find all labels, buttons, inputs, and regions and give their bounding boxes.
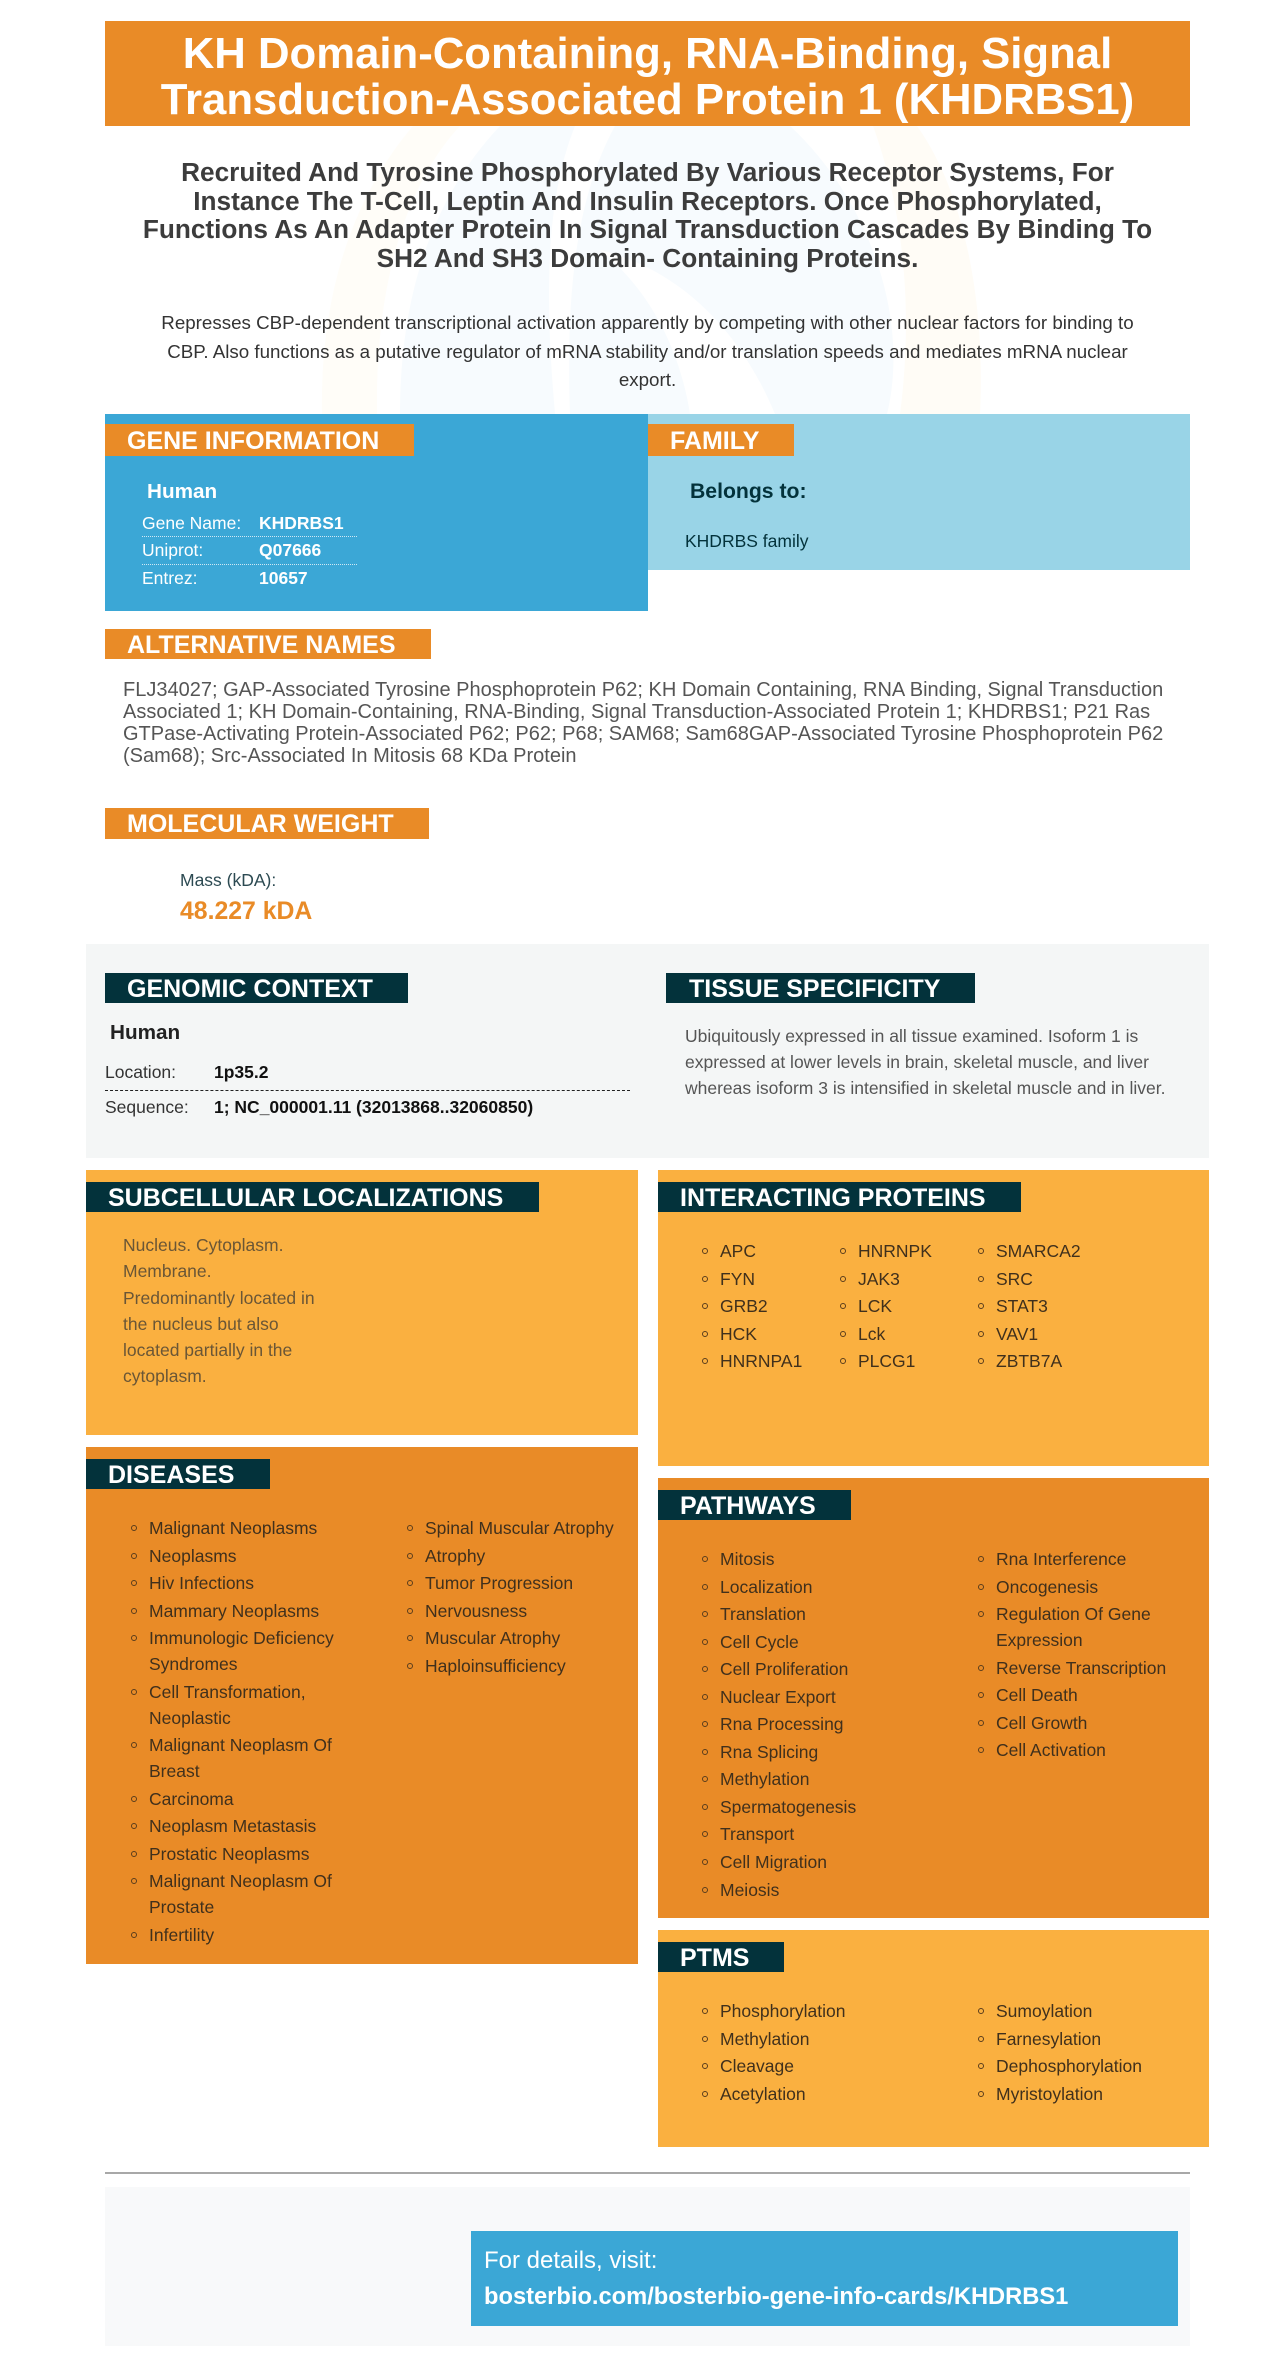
pathway list column 1: Transport	[720, 1824, 794, 1844]
heading: alternative names: ALTERNATIVE NAMES	[127, 631, 396, 659]
heading: pathways	[658, 1490, 851, 1520]
protein list column 3: STAT3	[996, 1296, 1048, 1316]
pathway list column 2: Cell Activation	[996, 1740, 1106, 1760]
heading: family: FAMILY	[670, 427, 759, 455]
description: Represses CBP-dependent transcriptional activation apparently by competing with other nuclear factors for binding to	[161, 312, 1134, 333]
heading: genomic context: GENOMIC CONTEXT	[127, 975, 373, 1003]
disease list column 1: Malignant Neoplasm Of	[149, 1871, 332, 1891]
localization text: the nucleus but also	[123, 1314, 279, 1334]
title banner	[105, 21, 1190, 126]
disease list column 1: Neoplasms	[149, 1546, 237, 1566]
ptm list column 1	[702, 2001, 846, 2104]
protein list column 2	[840, 1241, 932, 1371]
pathway list column 2: Expression	[996, 1630, 1083, 1650]
panel: pathways	[658, 1478, 1209, 1918]
pathway list column 1: Methylation	[720, 1769, 810, 1789]
protein list column 1	[702, 1241, 802, 1371]
disease list column 2: Nervousness	[425, 1601, 527, 1621]
protein list column 2: LCK	[858, 1296, 892, 1316]
location row: Location:	[105, 1062, 176, 1082]
heading: interacting proteins: INTERACTING PROTEINS	[680, 1184, 986, 1212]
protein list column 1: FYN	[720, 1269, 755, 1289]
heading: tissue specificity: TISSUE SPECIFICITY	[689, 975, 940, 1003]
localization text: Predominantly located in	[123, 1288, 315, 1308]
panel: gene information	[105, 414, 648, 611]
sequence row: Sequence:	[105, 1097, 189, 1117]
disease list column 2: Muscular Atrophy	[425, 1628, 560, 1648]
species label: Human	[110, 1021, 180, 1044]
ptm list column 2: Dephosphorylation	[996, 2056, 1142, 2076]
disease list column 1: Hiv Infections	[149, 1573, 254, 1593]
panel: ptms	[658, 1930, 1209, 2147]
alternative names text	[123, 679, 1163, 767]
disease list column 1: Neoplasm Metastasis	[149, 1816, 316, 1836]
subtitle: Instance The T-Cell, Leptin And Insulin Receptors. Once Phosphorylated,	[193, 186, 1102, 216]
pathway list column 2: Reverse Transcription	[996, 1658, 1166, 1678]
localization text: Nucleus. Cytoplasm.	[123, 1235, 283, 1255]
alternative names text: FLJ34027; GAP-Associated Tyrosine Phosphoprotein P62; KH Domain Containing, RNA Binding, Signal Transduction	[123, 679, 1163, 701]
pathway list column 1: Meiosis	[720, 1880, 779, 1900]
alternative names text: Associated 1; KH Domain-Containing, RNA-Binding, Signal Transduction-Associated Protein 1; KHDRBS1; P21 Ras	[123, 701, 1150, 723]
subtitle: SH2 And SH3 Domain- Containing Proteins.	[377, 243, 918, 273]
panel: interacting proteins	[658, 1170, 1209, 1466]
protein list column 1: HNRNPA1	[720, 1351, 802, 1371]
gene details table: Entrez:	[142, 568, 197, 588]
disease list column 1: Infertility	[149, 1925, 214, 1945]
protein list column 2: PLCG1	[858, 1351, 915, 1371]
localization text: located partially in the	[123, 1340, 292, 1360]
ptm list column 1: Cleavage	[720, 2056, 794, 2076]
protein list column 1: APC	[720, 1241, 756, 1261]
disease list column 1: Mammary Neoplasms	[149, 1601, 319, 1621]
disease list column 2	[407, 1518, 614, 1676]
heading: pathways: PATHWAYS	[680, 1492, 816, 1520]
ptm list column 2: Sumoylation	[996, 2001, 1092, 2021]
pathway list column 1	[702, 1549, 856, 1900]
pathway list column 2: Rna Interference	[996, 1549, 1126, 1569]
pathway list column 1: Cell Proliferation	[720, 1659, 848, 1679]
pathway list column 1: Rna Processing	[720, 1714, 844, 1734]
disease list column 1: Malignant Neoplasms	[149, 1518, 317, 1538]
pathway list column 2: Cell Death	[996, 1685, 1078, 1705]
subtitle: Functions As An Adapter Protein In Signal Transduction Cascades By Binding To	[143, 214, 1152, 244]
protein list column 3	[978, 1241, 1081, 1371]
localization text: cytoplasm.	[123, 1366, 207, 1386]
protein list column 3: VAV1	[996, 1324, 1038, 1344]
alternative names text: (Sam68); Src-Associated In Mitosis 68 KDa Protein	[123, 745, 577, 767]
gene details table: Gene Name:	[142, 513, 241, 533]
mass label: Mass (kDA):	[180, 870, 276, 890]
disease list column 1: Neoplastic	[149, 1708, 231, 1728]
pathway list column 1: Nuclear Export	[720, 1687, 836, 1707]
belongs to label: Belongs to:	[690, 480, 807, 503]
pathway list column 1: Mitosis	[720, 1549, 774, 1569]
gene details table: Uniprot:	[142, 540, 203, 560]
pathway list column 1: Spermatogenesis	[720, 1797, 856, 1817]
ptm list column 2: Farnesylation	[996, 2029, 1101, 2049]
disease list column 1: Malignant Neoplasm Of	[149, 1735, 332, 1755]
disease list column 2: Haploinsufficiency	[425, 1656, 566, 1676]
sequence row: 1; NC_000001.11 (32013868..32060850)	[214, 1097, 533, 1117]
protein list column 3: ZBTB7A	[996, 1351, 1062, 1371]
disease list column 1: Cell Transformation,	[149, 1682, 306, 1702]
heading: subcellular localizations: SUBCELLULAR LOCALIZATIONS	[108, 1184, 503, 1212]
heading: diseases	[86, 1459, 270, 1489]
pathway list column 2: Regulation Of Gene	[996, 1604, 1151, 1624]
subtitle	[143, 157, 1152, 273]
callout text: For details, visit:	[484, 2247, 657, 2274]
disease list column 1: Prostate	[149, 1897, 214, 1917]
panel: genomic context and tissue specificity	[86, 944, 1209, 1158]
pathway list column 2	[978, 1549, 1166, 1760]
description	[161, 312, 1134, 390]
description: CBP. Also functions as a putative regulator of mRNA stability and/or translation speeds and mediates mRNA nuclear	[167, 341, 1128, 362]
location row	[105, 1062, 268, 1082]
disease list column 1: Immunologic Deficiency	[149, 1628, 334, 1648]
protein list column 3: SMARCA2	[996, 1241, 1081, 1261]
ptm list column 1: Acetylation	[720, 2084, 806, 2104]
heading: ptms	[658, 1942, 784, 1972]
species label: Human	[147, 480, 217, 503]
callout: details link	[471, 2231, 1178, 2326]
gene details table: KHDRBS1	[259, 513, 344, 533]
mass value: 48.227 kDA	[180, 898, 312, 925]
subtitle: Recruited And Tyrosine Phosphorylated By Various Receptor Systems, For	[181, 157, 1114, 187]
family value: KHDRBS family	[685, 531, 808, 551]
gene details table: Q07666	[259, 540, 321, 560]
protein list column 3: SRC	[996, 1269, 1033, 1289]
gene details table	[142, 513, 357, 588]
ptm list column 2	[978, 2001, 1142, 2104]
disease list column 2: Spinal Muscular Atrophy	[425, 1518, 614, 1538]
tissue specificity text: whereas isoform 3 is intensified in skeletal muscle and in liver.	[685, 1078, 1166, 1098]
heading: diseases: DISEASES	[108, 1461, 234, 1489]
protein list column 1: HCK	[720, 1324, 757, 1344]
heading: gene information: GENE INFORMATION	[127, 427, 379, 455]
pathway list column 1: Cell Migration	[720, 1852, 827, 1872]
location row: 1p35.2	[214, 1062, 268, 1082]
protein list column 2: HNRNPK	[858, 1241, 932, 1261]
pathway list column 1: Cell Cycle	[720, 1632, 799, 1652]
disease list column 1	[131, 1518, 334, 1945]
disease list column 1: Prostatic Neoplasms	[149, 1844, 309, 1864]
tissue specificity text: Ubiquitously expressed in all tissue examined. Isoform 1 is	[685, 1026, 1138, 1046]
pathway list column 1: Localization	[720, 1577, 812, 1597]
localization text	[123, 1235, 315, 1386]
disease list column 1: Carcinoma	[149, 1789, 234, 1809]
protein list column 2: JAK3	[858, 1269, 900, 1289]
protein list column 1: GRB2	[720, 1296, 768, 1316]
pathway list column 2: Cell Growth	[996, 1713, 1087, 1733]
pathway list column 2: Oncogenesis	[996, 1577, 1098, 1597]
heading: ptms: PTMS	[680, 1944, 749, 1972]
title banner: Transduction-Associated Protein 1 (KHDRBS1)	[161, 75, 1134, 124]
localization text: Membrane.	[123, 1261, 212, 1281]
background watermark logo	[874, 126, 980, 414]
tissue specificity text	[685, 1026, 1166, 1098]
protein list column 2: Lck	[858, 1324, 885, 1344]
panel: diseases	[86, 1447, 638, 1964]
disease list column 1: Breast	[149, 1761, 200, 1781]
heading: molecular weight: MOLECULAR WEIGHT	[127, 810, 394, 838]
panel: family	[648, 414, 1190, 570]
gene details table: 10657	[259, 568, 308, 588]
ptm list column 1: Phosphorylation	[720, 2001, 846, 2021]
heading: family	[648, 424, 794, 456]
pathway list column 1: Translation	[720, 1604, 806, 1624]
alternative names text: GTPase-Activating Protein-Associated P62; P62; P68; SAM68; Sam68GAP-Associated Tyrosine Phosphoprotein P62	[123, 723, 1163, 745]
disease list column 2: Tumor Progression	[425, 1573, 573, 1593]
disease list column 2: Atrophy	[425, 1546, 485, 1566]
disease list column 1: Syndromes	[149, 1654, 238, 1674]
ptm list column 2: Myristoylation	[996, 2084, 1103, 2104]
panel: subcellular localizations	[86, 1170, 638, 1435]
panel: footer	[105, 2187, 1190, 2346]
title banner: KH Domain-Containing, RNA-Binding, Signal	[183, 28, 1112, 78]
pathway list column 1: Rna Splicing	[720, 1742, 818, 1762]
tissue specificity text: expressed at lower levels in brain, skeletal muscle, and liver	[685, 1052, 1149, 1072]
description: export.	[619, 369, 676, 390]
callout url: bosterbio.com/bosterbio-gene-info-cards/KHDRBS1	[484, 2284, 1068, 2310]
ptm list column 1: Methylation	[720, 2029, 810, 2049]
